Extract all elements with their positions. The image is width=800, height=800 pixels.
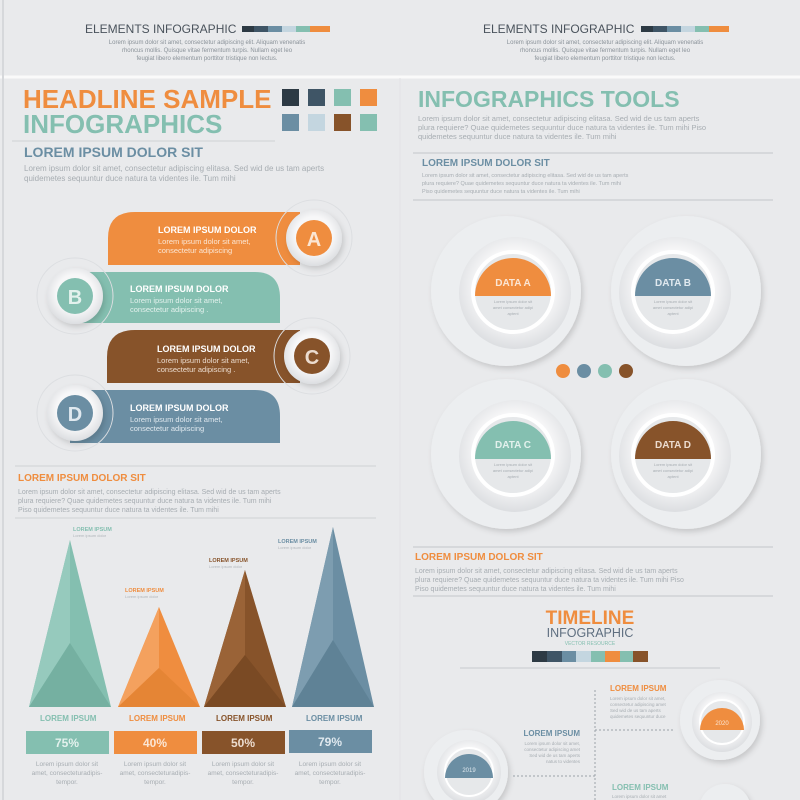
timeline item 2020: quidemetes sequuntur duce <box>610 714 666 719</box>
header: elements infographic right: Lorem ipsum dolor sit amet, consectetur adipiscing elit. Aliquam venenatis <box>507 40 703 46</box>
pyramid: teal 75%: Lorem ipsum dolor <box>73 533 107 538</box>
subheading left: LOREM IPSUM DOLOR SIT <box>24 144 203 160</box>
subheading orange right: LOREM IPSUM DOLOR SIT <box>415 552 543 563</box>
pyramid: blue 79%: 79% <box>318 735 342 749</box>
ribbon A <box>108 200 352 276</box>
ribbon A: A <box>307 229 321 251</box>
pyramid: brown 50%: 50% <box>231 736 255 750</box>
pyramid: brown 50%: Lorem ipsum dolor <box>209 564 243 569</box>
pyramid: teal 75%: amet, consecteturadipis- <box>32 770 102 777</box>
data circle C: amet consectetur adipi <box>493 468 533 473</box>
subheading orange left: LOREM IPSUM DOLOR SIT <box>18 473 146 484</box>
ribbon C: LOREM IPSUM DOLOR <box>157 344 256 354</box>
data circle A: aptent <box>507 311 519 316</box>
title: infographics tools: Lorem ipsum dolor sit amet, consectetur adipiscing elitasa. Sed wid de us tam aperts <box>418 114 700 123</box>
timeline item 2019: Sed wid de us tam aperts <box>529 753 581 758</box>
timeline item 3 <box>612 783 751 800</box>
ribbon B: consectetur adipiscing . <box>130 305 208 314</box>
ribbon D <box>37 375 280 451</box>
timeline item 2019: LOREM IPSUM <box>524 729 580 738</box>
headline: HEADLINE SAMPLE <box>23 84 271 114</box>
header: elements infographic left: feugiat libero elementum porttitor tristique non lectus. <box>136 56 278 62</box>
pyramid chart <box>26 527 374 786</box>
data circle C <box>431 379 581 529</box>
data circle D <box>611 379 761 529</box>
timeline item 2020: LOREM IPSUM <box>610 684 667 693</box>
subheading orange left: Lorem ipsum dolor sit amet, consectetur adipiscing elitasa. Sed wid de us tam aperts <box>18 489 281 496</box>
ribbon D: consectetur adipiscing <box>130 424 204 433</box>
header: elements infographic right: ELEMENTS INFOGRAPHIC <box>483 22 635 36</box>
data circle C: aptent <box>507 474 519 479</box>
timeline title: INFOGRAPHIC <box>547 626 633 640</box>
header: elements infographic left: Lorem ipsum dolor sit amet, consectetur adipiscing elit. Aliquam venenatis <box>109 40 305 46</box>
subheading right: plura requiere? Quae quidemetes sequuntur duce natura ta videntes ile. Tum mihi <box>422 181 621 187</box>
subheading orange left <box>18 473 281 514</box>
pyramid: orange 40%: 40% <box>143 736 167 750</box>
ribbon A: Lorem ipsum dolor sit amet, <box>158 237 251 246</box>
pyramid: orange 40%: Lorem ipsum dolor <box>125 594 159 599</box>
headline <box>23 84 271 139</box>
timeline item 2020: Lorem ipsum dolor sit amet, <box>610 696 666 701</box>
subheading right: LOREM IPSUM DOLOR SIT <box>422 158 550 169</box>
timeline title: TIMELINE <box>546 608 634 629</box>
data circle A <box>431 216 581 366</box>
timeline item 2020 <box>610 680 760 760</box>
pyramid: orange 40% <box>114 588 200 786</box>
data circle C: DATA C <box>495 440 531 451</box>
ribbon C: consectetur adipiscing . <box>157 365 235 374</box>
pyramid: brown 50%: LOREM IPSUM <box>216 714 273 723</box>
pyramid: orange 40%: LOREM IPSUM <box>125 588 164 594</box>
timeline title <box>532 608 648 662</box>
data circle B: amet consectetur adipi <box>653 305 693 310</box>
data circle A: DATA A <box>495 278 531 289</box>
header: elements infographic right <box>483 22 729 62</box>
ribbon B: LOREM IPSUM DOLOR <box>130 284 229 294</box>
subheading left <box>24 144 324 183</box>
data circle D: aptent <box>667 474 679 479</box>
pyramid: teal 75%: 75% <box>55 736 79 750</box>
pyramid: orange 40%: tempor. <box>144 779 166 786</box>
title: infographics tools <box>418 86 706 141</box>
pyramid: brown 50%: LOREM IPSUM <box>209 558 248 564</box>
pyramid: blue 79%: Lorem ipsum dolor sit <box>299 761 361 768</box>
timeline item 2020: 2020 <box>715 721 729 727</box>
pyramid: teal 75% <box>26 527 112 786</box>
pyramid: brown 50% <box>202 558 286 786</box>
subheading left: quidemetes sequuntur duce natura ta videntes ile. Tum mihi <box>24 174 236 183</box>
subheading right: Piso quidemetes sequuntur duce natura ta videntes ile. Tum mihi <box>422 189 580 195</box>
header: elements infographic right: feugiat libero elementum porttitor tristique non lectus. <box>534 56 676 62</box>
pyramid: blue 79%: LOREM IPSUM <box>278 539 317 545</box>
ribbon D: Lorem ipsum dolor sit amet, <box>130 415 223 424</box>
ribbon B <box>37 258 280 334</box>
pyramid: blue 79%: tempor. <box>319 779 341 786</box>
ribbon D: LOREM IPSUM DOLOR <box>130 403 229 413</box>
header: elements infographic left: rhoncus mollis. Quisque vitae fermentum turpis. Nullam eget leo <box>122 48 293 54</box>
subheading right <box>422 158 629 195</box>
ribbon C: Lorem ipsum dolor sit amet, <box>157 356 250 365</box>
pyramid: teal 75%: tempor. <box>56 779 78 786</box>
pyramid: orange 40%: LOREM IPSUM <box>129 714 186 723</box>
ribbon A: consectetur adipiscing <box>158 246 232 255</box>
ribbon D: D <box>68 404 82 426</box>
data circle B <box>611 216 761 366</box>
header: elements infographic left: ELEMENTS INFOGRAPHIC <box>85 22 237 36</box>
ribbon A: LOREM IPSUM DOLOR <box>158 225 257 235</box>
ribbon C <box>107 318 350 394</box>
colour swatches <box>282 89 377 131</box>
timeline connectors <box>513 690 675 800</box>
subheading orange right: Lorem ipsum dolor sit amet, consectetur adipiscing elitasa. Sed wid de us tam aperts <box>415 568 678 575</box>
timeline item 2019: 2019 <box>462 768 476 774</box>
pyramid: blue 79%: Lorem ipsum dolor <box>278 545 312 550</box>
subheading left: Lorem ipsum dolor sit amet, consectetur adipiscing elitasa. Sed wid de us tam aperts <box>24 164 324 173</box>
timeline item 2019: consectetur adipiscing amet <box>524 747 581 752</box>
subheading orange right: plura requiere? Quae quidemetes sequuntur duce natura ta videntes ile. Tum mihi Piso <box>415 577 684 584</box>
pyramid: brown 50%: Lorem ipsum dolor sit <box>212 761 274 768</box>
data circle B: aptent <box>667 311 679 316</box>
pyramid: brown 50%: amet, consecteturadipis- <box>208 770 278 777</box>
pyramid: teal 75%: LOREM IPSUM <box>73 527 112 533</box>
headline: INFOGRAPHICS <box>23 109 222 139</box>
pyramid: orange 40%: Lorem ipsum dolor sit <box>124 761 186 768</box>
timeline item 2020: consectetur adipiscing amet <box>610 702 667 707</box>
title: infographics tools: INFOGRAPHICS TOOLS <box>418 86 680 112</box>
timeline item 2019: Lorem ipsum dolor sit amet, <box>524 741 580 746</box>
data circle B: DATA B <box>655 278 691 289</box>
pyramid: orange 40%: amet, consecteturadipis- <box>120 770 190 777</box>
pyramid: blue 79%: LOREM IPSUM <box>306 714 363 723</box>
header: elements infographic left <box>85 22 330 62</box>
data circle A: Lorem ipsum dolor sit <box>494 299 533 304</box>
subheading orange left: plura requiere? Quae quidemetes sequuntur duce natura ta videntes ile. Tum mihi <box>18 498 272 505</box>
timeline item 2019 <box>424 729 581 800</box>
timeline title: VECTOR RESOURCE <box>565 641 616 647</box>
subheading orange left: Piso quidemetes sequuntur duce natura ta videntes ile. Tum mihi <box>18 507 219 514</box>
subheading orange right <box>415 552 684 593</box>
ribbon C: C <box>305 347 319 369</box>
timeline item 3: LOREM IPSUM <box>612 783 669 792</box>
ribbon B: Lorem ipsum dolor sit amet, <box>130 296 223 305</box>
data circle D: amet consectetur adipi <box>653 468 693 473</box>
ribbon B: B <box>68 287 82 309</box>
colour dots <box>556 364 633 378</box>
timeline item 2020: Sed wid de us tam aperts <box>610 708 662 713</box>
data circle C: Lorem ipsum dolor sit <box>494 462 533 467</box>
data circle D: DATA D <box>655 440 691 451</box>
timeline item 2019: natus to videntes <box>546 759 581 764</box>
timeline item 3: Lorem ipsum dolor sit amet <box>612 794 667 799</box>
pyramid: teal 75%: Lorem ipsum dolor sit <box>36 761 98 768</box>
pyramid: blue 79%: amet, consecteturadipis- <box>295 770 365 777</box>
pyramid: brown 50%: tempor. <box>232 779 254 786</box>
pyramid: teal 75%: LOREM IPSUM <box>40 714 97 723</box>
subheading orange right: Piso quidemetes sequuntur duce natura ta videntes ile. Tum mihi <box>415 586 616 593</box>
header: elements infographic right: rhoncus mollis. Quisque vitae fermentum turpis. Nullam eget leo <box>520 48 691 54</box>
data circle B: Lorem ipsum dolor sit <box>654 299 693 304</box>
data circle D: Lorem ipsum dolor sit <box>654 462 693 467</box>
title: infographics tools: plura requiere? Quae quidemetes sequuntur duce natura ta videntes ile. Tum mihi Piso <box>418 123 706 132</box>
subheading right: Lorem ipsum dolor sit amet, consectetur adipiscing elitasa. Sed wid de us tam aperts <box>422 173 629 179</box>
data circle A: amet consectetur adipi <box>493 305 533 310</box>
pyramid: blue 79% <box>278 527 374 786</box>
title: infographics tools: quidemetes sequuntur duce natura ta videntes ile. Tum mihi <box>418 132 617 141</box>
